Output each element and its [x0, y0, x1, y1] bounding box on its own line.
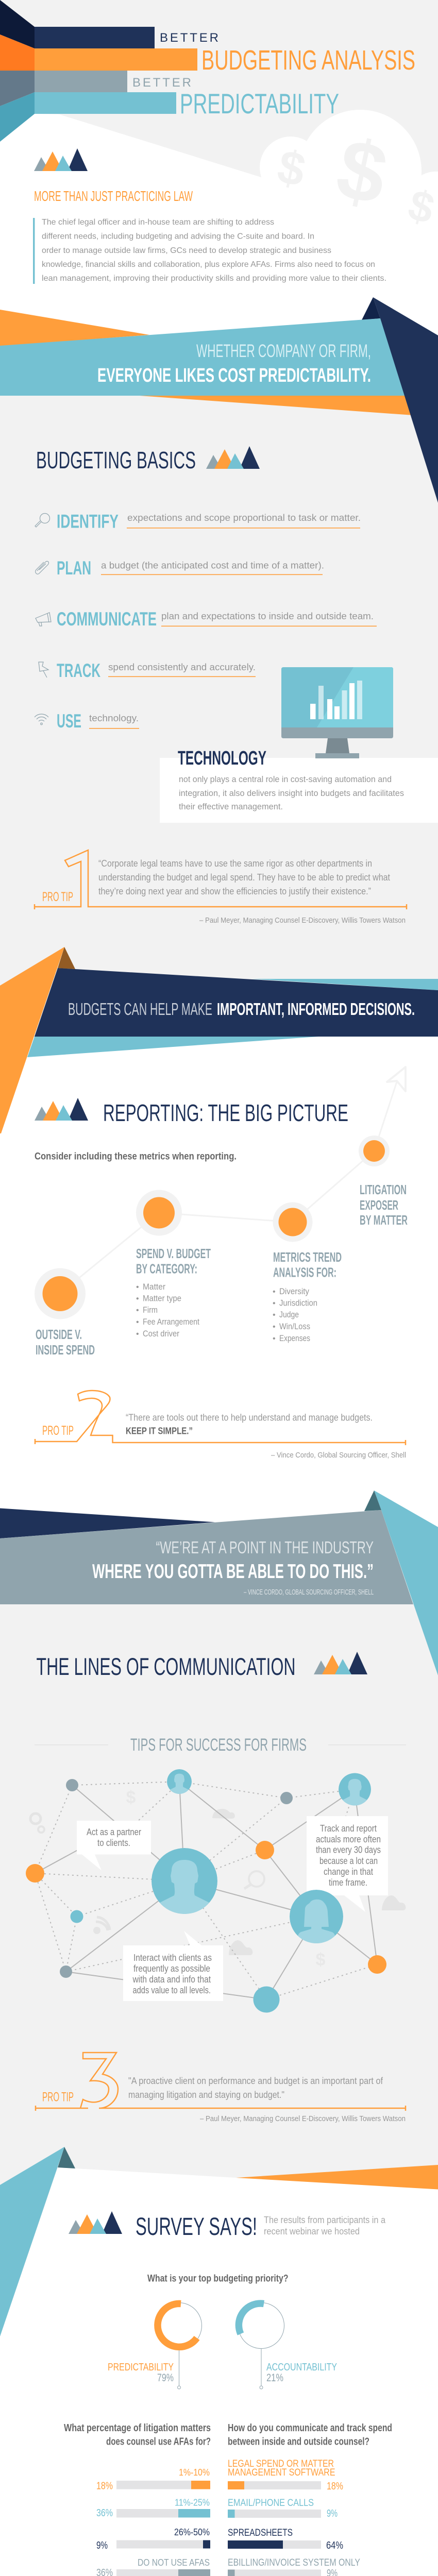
- label: metrics trend analysis: Jurisdiction: [279, 1298, 317, 1308]
- title: PREDICTABILITY: [180, 88, 339, 120]
- heading: more than just practicing law: MORE THAN JUST PRACTICING LAW: [34, 188, 193, 204]
- callout: interact with clients: Interact with clients as: [133, 1953, 212, 1963]
- label: outside v inside spend: INSIDE SPEND: [36, 1342, 95, 1358]
- label: metrics trend analysis: •: [273, 1311, 276, 1319]
- label: spend v budget: •: [136, 1306, 139, 1315]
- label: litigation exposer: [360, 1182, 408, 1228]
- label: outside v inside spend: [36, 1327, 95, 1358]
- chart: predictability donut: [108, 2303, 202, 2389]
- row: use: [35, 710, 139, 732]
- chart: communication method bars: 18%: [327, 2481, 343, 2492]
- chart: AFA usage bars: does counsel use AFAs for?: [106, 2436, 211, 2447]
- pro tip 2: PRO TIP: [42, 1423, 74, 1438]
- intro text block: order to manage outside law firms, GCs need to develop strategic and business: [42, 246, 331, 255]
- label: spend v budget: SPEND V. BUDGET: [136, 1246, 211, 1261]
- row: use: USE: [57, 710, 81, 732]
- pro tip 3: PRO TIP: [42, 2090, 74, 2104]
- panel: technology: TECHNOLOGY: [178, 748, 266, 769]
- chart: communication method bars: SPREADSHEETS: [228, 2528, 293, 2538]
- title bars: [0, 0, 197, 142]
- icon: person small top: [167, 1769, 192, 1795]
- pro tip 1: – Paul Meyer, Managing Counsel E-Discovery, Willis Towers Watson: [199, 916, 406, 925]
- row: track: spend consistently and accurately.: [108, 662, 256, 672]
- callout: interact with clients: [123, 1931, 223, 2001]
- chart: AFA usage bars: [64, 2422, 211, 2576]
- callout: act as a partner: [77, 1821, 151, 1870]
- pro tip 2: [35, 1391, 406, 1460]
- pro tip 1: [35, 850, 407, 925]
- section: hero: [0, 0, 438, 396]
- callout: track and report: than every 30 days: [316, 1844, 381, 1855]
- callout: act as a partner: to clients.: [97, 1838, 130, 1848]
- chart: accountability donut: [238, 2303, 337, 2389]
- pro tip 2: “There are tools out there to help understand and manage budgets.: [126, 1413, 373, 1423]
- icon: person top right: [339, 1773, 371, 1807]
- intro text block: knowledge, financial skills and collaboration, plus explore AFAs. Firms also need to focus on: [42, 260, 375, 269]
- chart: AFA usage bars: What percentage of litigation matters: [64, 2422, 211, 2434]
- chart: communication method bars: 9%: [327, 2508, 338, 2519]
- callout: interact with clients: frequently as possible: [133, 1963, 210, 1974]
- pro tip 2: KEEP IT SIMPLE.”: [126, 1426, 193, 1436]
- label: metrics trend analysis: [273, 1249, 342, 1343]
- row: plan: PLAN: [57, 557, 91, 579]
- pro tip 1: PRO TIP: [42, 890, 73, 904]
- chart: predictability donut: PREDICTABILITY: [108, 2362, 174, 2373]
- chart: AFA usage bars: 18%: [96, 2480, 113, 2492]
- label: spend v budget: •: [136, 1318, 139, 1327]
- label: spend v budget: •: [136, 1283, 139, 1292]
- callout: track and report: change in that: [324, 1867, 373, 1877]
- faint background icons: $: [316, 1950, 326, 1970]
- icon: monitor with bar chart: [281, 667, 393, 758]
- label: metrics trend analysis: Judge: [279, 1310, 299, 1319]
- label: litigation exposer: EXPOSER: [360, 1197, 398, 1213]
- icon: mountains: [35, 1098, 88, 1121]
- label: spend v budget: •: [136, 1330, 139, 1338]
- callout: track and report: actuals more often: [316, 1834, 381, 1844]
- label: metrics trend analysis: METRICS TREND: [273, 1249, 342, 1265]
- pro tip 1: understanding the budget and legal spend. They have to be able to predict what: [98, 872, 390, 883]
- row: identify: IDENTIFY: [57, 511, 119, 532]
- question: top budgeting priority: What is your top budgeting priority?: [147, 2273, 289, 2284]
- row: plan: [36, 557, 324, 579]
- panel: technology: [160, 748, 438, 823]
- label: spend v budget: •: [136, 1294, 139, 1303]
- label: spend v budget: Firm: [143, 1305, 158, 1315]
- subheading: Consider including these metrics when reporting.: [35, 1151, 237, 1162]
- chart: rising trend line with arrow: [35, 1067, 406, 1319]
- pro tip 3: "A proactive client on performance and budget is an important part of: [128, 2076, 383, 2086]
- title: [132, 31, 415, 120]
- panel: technology: not only plays a central role in cost-saving automation and: [179, 774, 392, 784]
- label: metrics trend analysis: Expenses: [279, 1333, 310, 1343]
- faint background icons: [30, 1788, 406, 1970]
- intro text block: different needs, including budgeting and advising the C-suite and board. In: [42, 232, 314, 241]
- label: spend v budget: Cost driver: [143, 1329, 179, 1338]
- faint background icons: $: [126, 1788, 136, 1807]
- icon: cloud with dollar signs: [260, 110, 438, 233]
- callout: interact with clients: adds value to all levels.: [133, 1985, 211, 1995]
- title: BETTER: [132, 76, 191, 90]
- banner: informed decisions: [0, 947, 438, 1133]
- row: communicate: plan and expectations to inside and outside team.: [161, 611, 374, 621]
- icon: female person: [290, 1890, 343, 1947]
- section: reporting: [35, 1067, 408, 1358]
- title: BETTER: [160, 31, 218, 45]
- callout: act as a partner: Act as a partner: [87, 1827, 141, 1837]
- callout: interact with clients: with data and info that: [132, 1974, 211, 1985]
- chart: communication method bars: [228, 2422, 392, 2576]
- label: metrics trend analysis: •: [273, 1323, 276, 1331]
- row: track: [39, 660, 256, 681]
- connector lines: [35, 1782, 377, 1999]
- label: metrics trend analysis: ANALYSIS FOR:: [273, 1264, 336, 1280]
- label: spend v budget: Fee Arrangement: [143, 1317, 199, 1327]
- callout: track and report: [307, 1816, 388, 1912]
- icon: mountains: [206, 446, 260, 469]
- banner: cost predictability: [0, 297, 438, 1037]
- section: lines of communication: [26, 1652, 406, 2012]
- label: metrics trend analysis: Diversity: [279, 1286, 309, 1296]
- subheading: tips for success: TIPS FOR SUCCESS FOR FIRMS: [130, 1735, 307, 1755]
- icon: cloud with dollar signs: $: [273, 140, 310, 197]
- survey intro text: [264, 2215, 386, 2236]
- label: spend v budget: BY CATEGORY:: [136, 1261, 197, 1277]
- intro text block: lean management, improving their productivity skills and providing more value to their clients.: [42, 274, 386, 283]
- row: track: TRACK: [57, 660, 100, 681]
- row: communicate: [36, 608, 377, 630]
- icon: mountains: [314, 1652, 367, 1674]
- section: reporting background: [0, 1037, 438, 1604]
- icon: cloud with dollar signs: $: [329, 120, 395, 223]
- nodes: [26, 1779, 386, 2012]
- pro tip 2: – Vince Cordo, Global Sourcing Officer, Shell: [271, 1451, 406, 1460]
- row: identify: [35, 511, 361, 532]
- section: survey says: [0, 2147, 438, 2576]
- banner: informed decisions: BUDGETS CAN HELP MAKE: [68, 999, 212, 1019]
- label: metrics trend analysis: •: [273, 1334, 276, 1343]
- diagram: network: [26, 1769, 406, 2012]
- chart: accountability donut: ACCOUNTABILITY: [266, 2362, 337, 2373]
- chart: communication method bars: How do you communicate and track spend: [228, 2422, 392, 2434]
- label: litigation exposer: LITIGATION: [360, 1182, 407, 1197]
- callout: track and report: Track and report: [320, 1823, 377, 1834]
- label: spend v budget: Matter: [143, 1282, 165, 1292]
- chart: AFA usage bars: DO NOT USE AFAS: [138, 2557, 210, 2568]
- icon: mountains: [69, 2211, 122, 2234]
- chart: communication method bars: 64%: [326, 2540, 343, 2551]
- banner: industry quote: [0, 1490, 438, 1675]
- chart: AFA usage bars: 36%: [96, 2507, 113, 2519]
- survey intro text: The results from participants in a: [264, 2215, 386, 2225]
- row: use: technology.: [89, 713, 139, 723]
- pro tip 3: – Paul Meyer, Managing Counsel E-Discovery, Willis Towers Watson: [200, 2114, 406, 2123]
- chart: communication method bars: EBILLING/INVOICE SYSTEM ONLY: [228, 2557, 360, 2568]
- chart: AFA usage bars: 26%-50%: [174, 2527, 210, 2537]
- chart: AFA usage bars: 11%-25%: [175, 2498, 210, 2508]
- label: litigation exposer: BY MATTER: [360, 1212, 408, 1228]
- label: metrics trend analysis: •: [273, 1299, 276, 1308]
- chart: communication method bars: MANAGEMENT SOFTWARE: [228, 2467, 335, 2478]
- panel: technology: integration, it also delivers insight into budgets and facilitates: [179, 788, 404, 798]
- row: identify: expectations and scope proportional to task or matter.: [127, 513, 361, 523]
- intro text block: [33, 218, 386, 284]
- label: spend v budget: Matter type: [143, 1293, 181, 1303]
- chart: accountability donut: 21%: [266, 2372, 283, 2384]
- heading: survey says: SURVEY SAYS!: [136, 2213, 257, 2241]
- heading: budgeting basics: BUDGETING BASICS: [36, 447, 196, 473]
- pro tip 1: “Corporate legal teams have to use the same rigor as other departments in: [98, 858, 372, 869]
- label: spend v budget: [136, 1246, 211, 1338]
- section: budgeting basics: [35, 446, 438, 823]
- label: outside v inside spend: OUTSIDE V.: [36, 1327, 82, 1342]
- intro text block: The chief legal officer and in-house team are shifting to address: [42, 218, 274, 227]
- row: communicate: COMMUNICATE: [57, 608, 157, 630]
- chart: communication method bars: between inside and outside counsel?: [228, 2436, 369, 2447]
- row: plan: a budget (the anticipated cost and time of a matter).: [101, 561, 324, 571]
- callout: track and report: because a lot can: [319, 1856, 378, 1866]
- heading: lines of communication: THE LINES OF COMMUNICATION: [36, 1653, 296, 1680]
- pro tip 3: [36, 2053, 406, 2123]
- survey intro text: recent webinar we hosted: [264, 2226, 360, 2236]
- chart: AFA usage bars: 1%-10%: [179, 2467, 210, 2478]
- pro tip 3: managing litigation and staying on budget.": [128, 2090, 284, 2100]
- label: metrics trend analysis: •: [273, 1287, 276, 1296]
- panel: technology: their effective management.: [179, 802, 283, 811]
- chart: communication method bars: LEGAL SPEND OR MATTER: [228, 2459, 334, 2469]
- chart: AFA usage bars: 9%: [96, 2540, 108, 2551]
- callout: track and report: time frame.: [329, 1877, 367, 1888]
- icon: mountains: [34, 148, 88, 171]
- chart: communication method bars: EMAIL/PHONE CALLS: [228, 2498, 314, 2509]
- banner: industry quote: – VINCE CORDO, GLOBAL SOURCING OFFICER, SHELL: [244, 1588, 374, 1597]
- icon: large person: [151, 1848, 217, 1917]
- pro tip 1: they’re doing next year and show the efficiencies to justify their existence.”: [98, 886, 371, 896]
- chart: predictability donut: 79%: [157, 2372, 174, 2384]
- label: metrics trend analysis: Win/Loss: [279, 1321, 310, 1331]
